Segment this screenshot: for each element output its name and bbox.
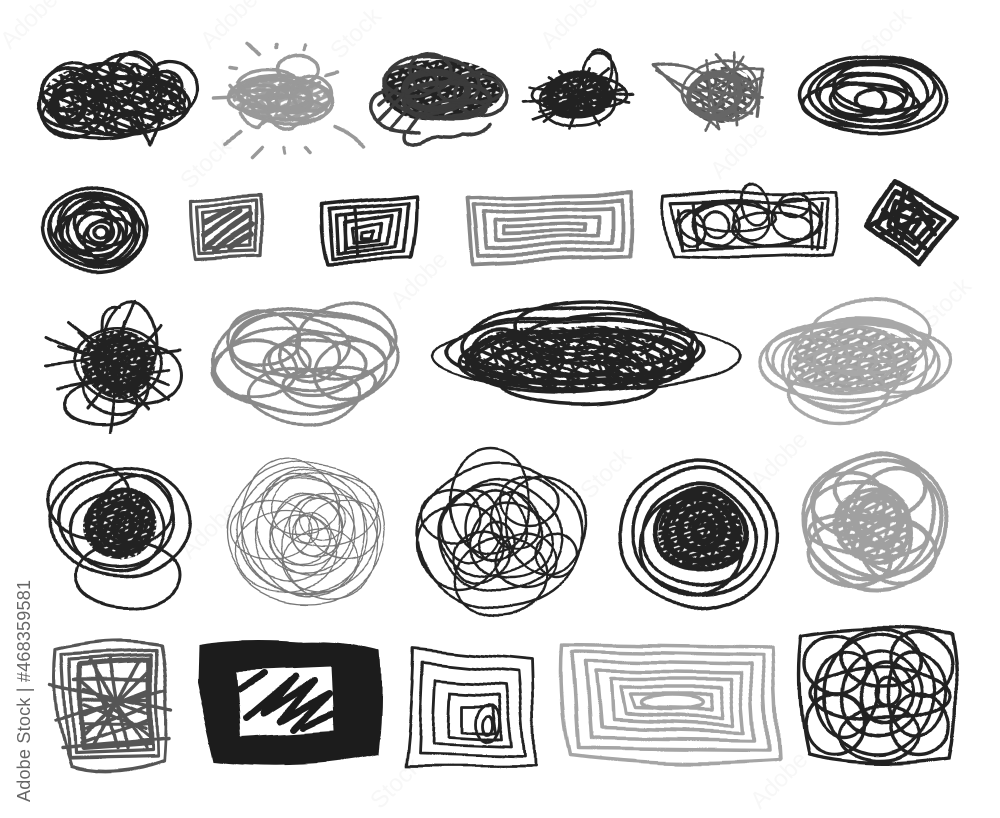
scribble row 3 col 3: wide dark tangle (432, 301, 738, 404)
scribble row 2 col 5: dark rectangle with circles (663, 184, 836, 259)
scribble row 1 col 6: dark oval spiral (799, 57, 947, 133)
watermark text: Adobe (745, 746, 813, 814)
scribble row 4 col 2: thin grey ball (227, 460, 387, 602)
scribble row 2 col 3: dark square spiral (322, 195, 416, 262)
scribble row 5 col 4: grey rectangle spiral (561, 645, 778, 763)
scribble row 4 col 4: dark ball with dense centre (619, 463, 775, 607)
scribble row 3 col 2: grey loose tangle (213, 302, 397, 423)
watermark text: Adobe (175, 496, 243, 564)
scribble row 2 col 1: dark round spiral (45, 186, 147, 270)
watermark text: Stock (325, 2, 387, 64)
scribble row 2 col 2: grey square hatch (190, 197, 263, 259)
watermark text: Stock (855, 2, 917, 64)
scribble row 5 col 2: solid black thick rectangle (197, 641, 382, 766)
scribble row 1 col 3: dark cloud with hatch (370, 54, 505, 143)
scribble row 5 col 1: dark grey square hatch (50, 641, 172, 773)
watermark text: Stock (175, 132, 237, 194)
watermark text: Stock (575, 442, 637, 504)
scribble row 4 col 3: black open loop ball (418, 448, 585, 615)
watermark text: Adobe (385, 246, 453, 314)
watermark text: Adobe (705, 116, 773, 184)
scribble row 5 col 3: dark square spiral (405, 648, 535, 765)
scribble row 1 col 5: grey spiky tangle (652, 55, 765, 130)
scribble row 4 col 5: light grey loop ball (804, 455, 948, 588)
watermark text: Stock (915, 272, 977, 334)
scribble row 3 col 4: light grey tangle (758, 300, 952, 423)
scribble row 1 col 4: spiky dark tangle (522, 52, 634, 128)
scribble row 1 col 1: dark tangled cloud (40, 54, 198, 145)
stock id vertical caption: Adobe Stock | #468359581 (14, 580, 34, 802)
scribble row 2 col 4: grey wide rectangle spiral (467, 194, 632, 264)
scribble row 4 col 1: dark ball with large loops (50, 462, 192, 607)
watermark text: Stock (365, 752, 427, 814)
watermark text: Adobe (745, 426, 813, 494)
scribble row 1 col 2: grey cloud with rays (215, 42, 364, 160)
scribble row 2 col 6: dark diamond hatch (866, 182, 956, 266)
scribble row 5 col 5: dark square loops (800, 628, 956, 763)
scribble row 3 col 1: spiky dark tangle (46, 300, 183, 432)
